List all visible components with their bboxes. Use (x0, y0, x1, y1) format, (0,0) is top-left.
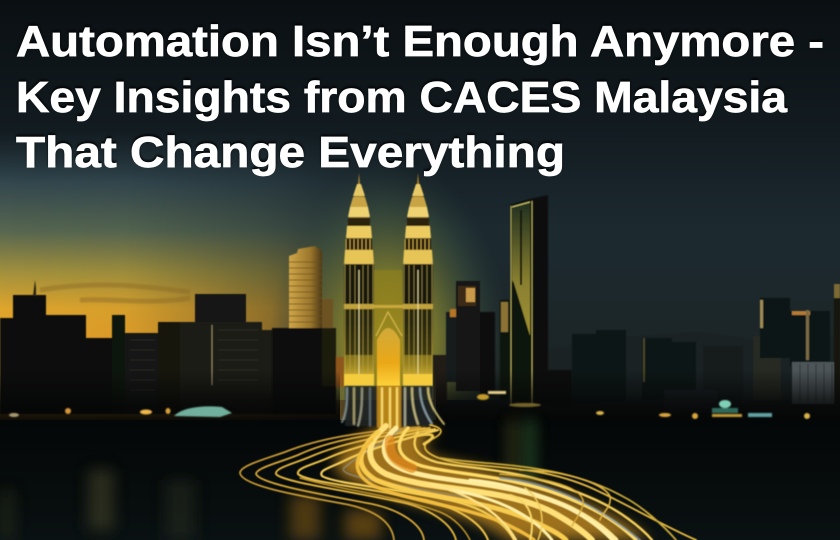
bridge struts (376, 312, 402, 336)
right tower (403, 173, 433, 386)
skyline: right district (572, 284, 840, 412)
stream glow (335, 425, 650, 540)
skyline base shading left (0, 370, 340, 420)
Petronas towers (344, 173, 433, 390)
skyline base shading right (436, 370, 840, 420)
golden light stream (240, 386, 696, 540)
central bright strands (357, 425, 696, 540)
central podium (377, 328, 400, 386)
skyline: left district (0, 280, 273, 414)
boat (174, 406, 232, 417)
title (16, 17, 824, 177)
title line 1: Automation Isn’t Enough Anymore - (16, 17, 824, 66)
sky background (0, 72, 840, 420)
skyline: centre right (433, 195, 572, 406)
left loop strands (240, 427, 514, 540)
left tower (344, 173, 374, 386)
mosque dome (719, 400, 731, 408)
distant hills (550, 332, 840, 400)
gold highrise (272, 246, 344, 414)
water (0, 420, 840, 540)
sky bridge (372, 305, 404, 308)
vertical strands below towers (342, 386, 444, 430)
title line 3: That Change Everything (16, 128, 565, 177)
waterfront lights (9, 391, 810, 419)
title line 2: Key Insights from CACES Malaysia (16, 73, 788, 122)
